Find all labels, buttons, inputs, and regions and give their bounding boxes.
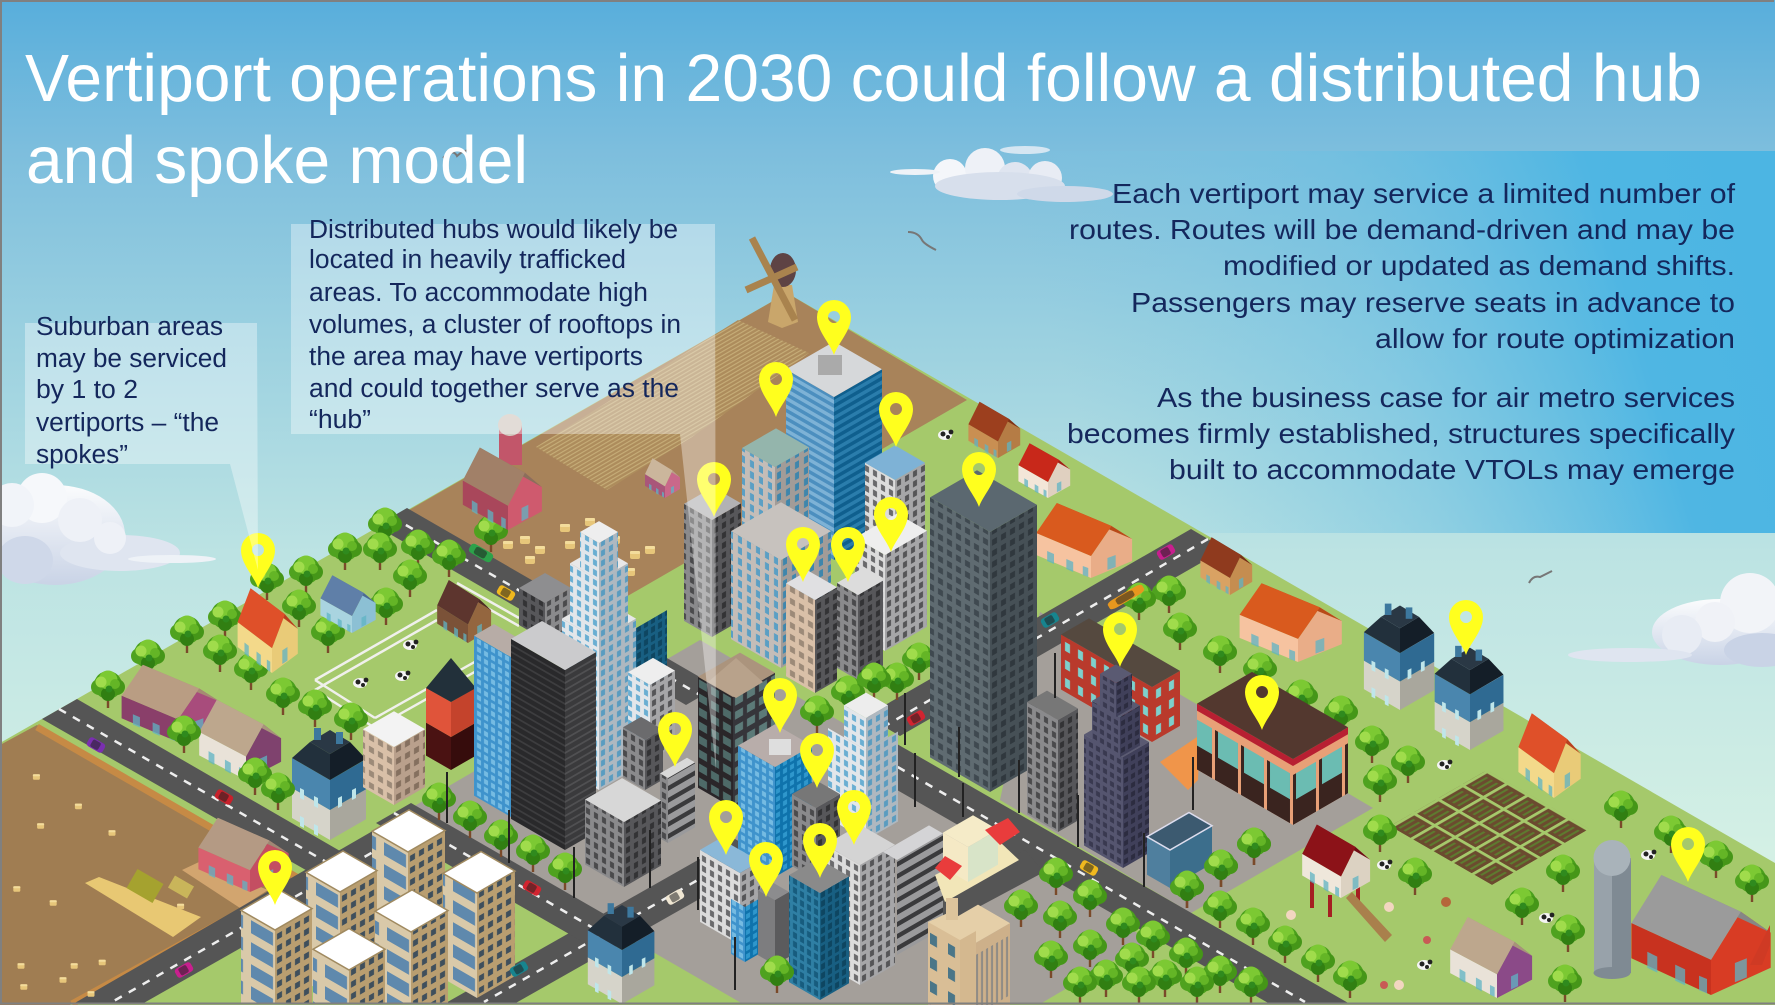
birds (443, 150, 1552, 583)
fire station rooftop vertiport (1197, 672, 1348, 825)
blue house (320, 575, 376, 633)
grey silo (1594, 840, 1631, 979)
brown house (437, 580, 491, 643)
text block: business case: becomes firmly established, structures specifically (1067, 418, 1735, 449)
animals (353, 430, 1656, 990)
tower: grey block west (786, 571, 837, 693)
tower: dark grey (684, 487, 741, 637)
tower: sky-blue centre (738, 724, 812, 877)
harvest field lower left (0, 725, 300, 1005)
tower: grey back west (623, 717, 663, 790)
text block: route operations: allow for route optimization (1375, 323, 1735, 354)
ground: isometric city base (0, 293, 1775, 1005)
callout text: suburban: may be serviced (36, 345, 227, 373)
cream store (935, 815, 1020, 902)
apartment cluster (241, 810, 515, 1005)
tower: dark grey mid (792, 780, 840, 880)
pin: navy house (1449, 600, 1483, 655)
tree: city foreground (760, 956, 794, 993)
red-roof house (1018, 443, 1070, 498)
office: grey with rooftop plant (585, 778, 661, 887)
farm machinery (127, 856, 238, 903)
text block: route operations: modified or updated as demand shifts. (1223, 250, 1735, 281)
callout text: suburban: Suburban areas (36, 313, 223, 341)
red brick house (426, 658, 476, 770)
yellow house right (1518, 713, 1581, 798)
crop plots grid (1390, 770, 1589, 885)
callout text: hubs: Distributed hubs would likely be (309, 216, 678, 244)
beige small apartment (363, 711, 425, 805)
office: striped grey (883, 825, 943, 955)
large orange house (1036, 503, 1132, 578)
pin: city 7 (837, 790, 871, 845)
beige office bottom (928, 898, 1010, 1005)
pin: fire station (1245, 675, 1279, 730)
text block: route operations: routes. Routes will be demand-driven and may be (1069, 214, 1735, 245)
pin: city 8 (786, 527, 820, 582)
crop rows (536, 320, 809, 490)
pin: slate tower (962, 452, 996, 507)
pin: city 11 (759, 362, 793, 417)
paved city lots (411, 612, 1373, 1004)
pin: apartments (258, 850, 292, 905)
navy house right back (1364, 604, 1434, 710)
pin: city 12 (817, 300, 851, 355)
large orange house right (1240, 583, 1342, 662)
trees: right neighbourhood (880, 576, 1769, 1002)
yellow house, vertiport spoke (238, 588, 298, 673)
tower: brown-roof dark (698, 653, 775, 808)
orange-roof house, top right (968, 402, 1020, 458)
tower: striped spoke building (660, 758, 695, 843)
tan house (1200, 537, 1252, 595)
tower: dark grey east (1027, 691, 1078, 832)
pin: suburb (241, 533, 275, 588)
trees: right lot (1170, 828, 1271, 908)
pin: city 4 (709, 800, 743, 855)
callout text: hubs: volumes, a cluster of rooftops in (309, 311, 681, 339)
tower: grey south (758, 882, 789, 965)
purple house bottom right (1450, 917, 1532, 998)
navy house right front, spoke (1435, 646, 1503, 750)
callout text: hubs: the area may have vertiports (309, 343, 643, 371)
purple house (199, 700, 281, 780)
navy house bottom (588, 903, 654, 1004)
silo: farm (498, 414, 522, 465)
pasture fence (315, 583, 519, 728)
pin: civic building (1103, 612, 1137, 667)
pin: city 2 (763, 678, 797, 733)
vehicles (86, 542, 1176, 979)
trees: along cross street (167, 716, 582, 890)
text block: business case: As the business case for air metro services (1157, 382, 1735, 413)
orange court (1160, 735, 1200, 790)
cloud: left (0, 473, 216, 585)
title: and spoke model (26, 123, 528, 198)
pin: city 3 (800, 733, 834, 788)
tower: white-grey large (825, 825, 895, 985)
tower: large slate (930, 470, 1037, 792)
trees: lower park (1004, 858, 1268, 1004)
tower: grey block east (837, 568, 883, 680)
cloud: top (890, 146, 1113, 202)
callout text: suburban: spokes” (36, 441, 128, 469)
trees: suburb and roadside (91, 508, 508, 740)
street lamps (447, 653, 1193, 990)
hay bales: field (13, 774, 184, 1005)
tower: grey, pale-blue roof (865, 445, 925, 560)
trees: plaza (800, 662, 891, 733)
title: Vertiport operations in 2030 could follow a distributed hub (25, 41, 1702, 116)
tower: purple stepped (1084, 665, 1149, 868)
pin: city 1 (658, 712, 692, 767)
road network (42, 508, 1350, 1004)
tower: white (855, 513, 927, 651)
chicken coop (1302, 824, 1392, 942)
text block: route operations: Each vertiport may service a limited number of (1112, 178, 1735, 209)
small teal building (1147, 812, 1212, 888)
tower: white-blue east (828, 693, 898, 840)
callout text: hubs: areas. To accommodate high (309, 279, 648, 307)
purple barn (122, 665, 220, 742)
tower: stepped beige (731, 428, 831, 668)
tower: teal south (789, 858, 849, 1000)
tower: blue core (786, 342, 882, 560)
tower: small blue south (731, 899, 759, 962)
red brick civic building (1061, 618, 1180, 742)
red barn (1631, 875, 1771, 995)
callout text: hubs: “hub” (309, 406, 371, 434)
location pins (241, 300, 1705, 905)
callout text: suburban: by 1 to 2 (36, 376, 138, 404)
small barn: farm (645, 458, 680, 498)
tower: sky-blue west (474, 624, 531, 817)
hay bales: farm (503, 518, 655, 576)
text block: business case: built to accommodate VTOLs may emerge (1169, 454, 1735, 485)
tower: pale-blue roof south (700, 838, 760, 945)
navy house left (292, 728, 366, 840)
tower: white-blue skyscraper (562, 521, 675, 790)
pin: city 10 (697, 462, 731, 517)
tower: dark grey small west (519, 573, 571, 640)
callout panel: distributed hubs (291, 216, 716, 770)
road centre dashes (59, 517, 1305, 1002)
barn: farm (463, 448, 542, 530)
tower: black (511, 621, 596, 850)
pin: city 13 (874, 497, 908, 552)
farm plot (409, 293, 967, 616)
shed: field (198, 818, 289, 892)
callout panel: suburban spokes (25, 313, 258, 570)
callout text: hubs: and could together serve as the (309, 375, 679, 403)
pin: city 5 (749, 842, 783, 897)
pin: city 9 (831, 527, 865, 582)
text block: route operations: Passengers may reserve seats in advance to (1131, 287, 1735, 318)
windmill (746, 238, 798, 328)
callout text: suburban: vertiports – “the (36, 409, 219, 437)
callout text: hubs: located in heavily trafficked (309, 246, 626, 274)
pin: red barn (1671, 827, 1705, 882)
pin: city 6 (803, 823, 837, 878)
pin: city 14 (879, 392, 913, 447)
cloud: right (1568, 573, 1775, 667)
